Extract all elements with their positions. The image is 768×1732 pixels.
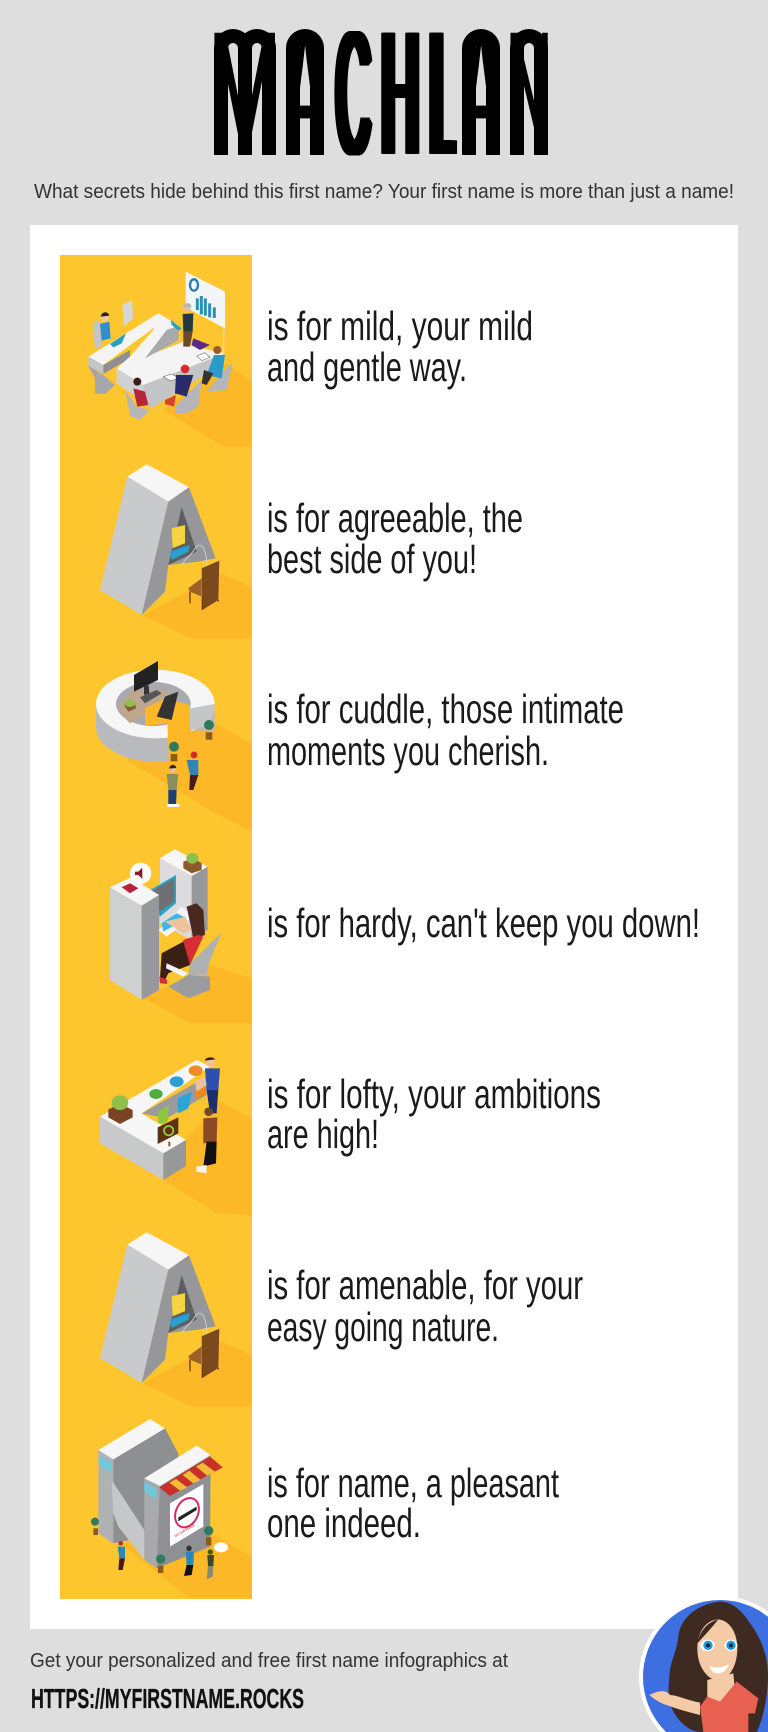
illustration: letter N shop front [91, 1419, 252, 1598]
text: L line: are high! [267, 1111, 379, 1157]
panel: white card [30, 225, 738, 1629]
footer url: HTTPS://MYFIRSTNAME.ROCKS [31, 1683, 304, 1714]
title: A [286, 0, 324, 193]
text: N line [267, 1460, 559, 1546]
title [207, 0, 553, 193]
text: C line: moments you cherish. [267, 728, 549, 774]
title: C [332, 0, 366, 193]
illustration: letter C reception desk [96, 661, 252, 832]
text: L line: is for lofty, your ambitions [267, 1071, 601, 1117]
footer call to action: Get your personalized and free first name infographics at [30, 1650, 508, 1672]
illustration: letter L recycling counter [100, 1057, 252, 1215]
text: A line: best side of you! [267, 536, 477, 582]
panel: yellow illustration strip [60, 255, 252, 1599]
title: L [426, 0, 448, 193]
title: H [377, 0, 414, 193]
illustration: letter H workstation [110, 849, 252, 1023]
text: second A line: is for amenable, for your [267, 1262, 583, 1308]
text: second A line [267, 1262, 583, 1350]
text: M line [267, 303, 533, 390]
text: M line: and gentle way. [267, 344, 467, 390]
text: N line: one indeed. [267, 1500, 421, 1546]
title: M [207, 0, 282, 193]
subtitle: What secrets hide behind this first name? Your first name is more than just a name! [34, 181, 734, 203]
illustration: letter A desk (second) [100, 1232, 252, 1406]
text: A line [267, 495, 523, 582]
illustration: letter M meeting table [88, 272, 252, 447]
icon: avatar woman in blue circle [641, 1598, 768, 1732]
text: second A line: easy going nature. [267, 1304, 499, 1350]
text: L line [267, 1071, 601, 1157]
text: M line: is for mild, your mild [267, 303, 533, 349]
title: N [505, 0, 553, 193]
illustration: letter A desk [100, 464, 252, 638]
text: C line: is for cuddle, those intimate [267, 686, 624, 732]
title: A [462, 0, 500, 193]
illustration: letter N shop front: NO SMOKING [174, 1523, 196, 1538]
text: N line: is for name, a pleasant [267, 1460, 559, 1506]
text: C line [267, 686, 624, 774]
text: A line: is for agreeable, the [267, 495, 523, 541]
